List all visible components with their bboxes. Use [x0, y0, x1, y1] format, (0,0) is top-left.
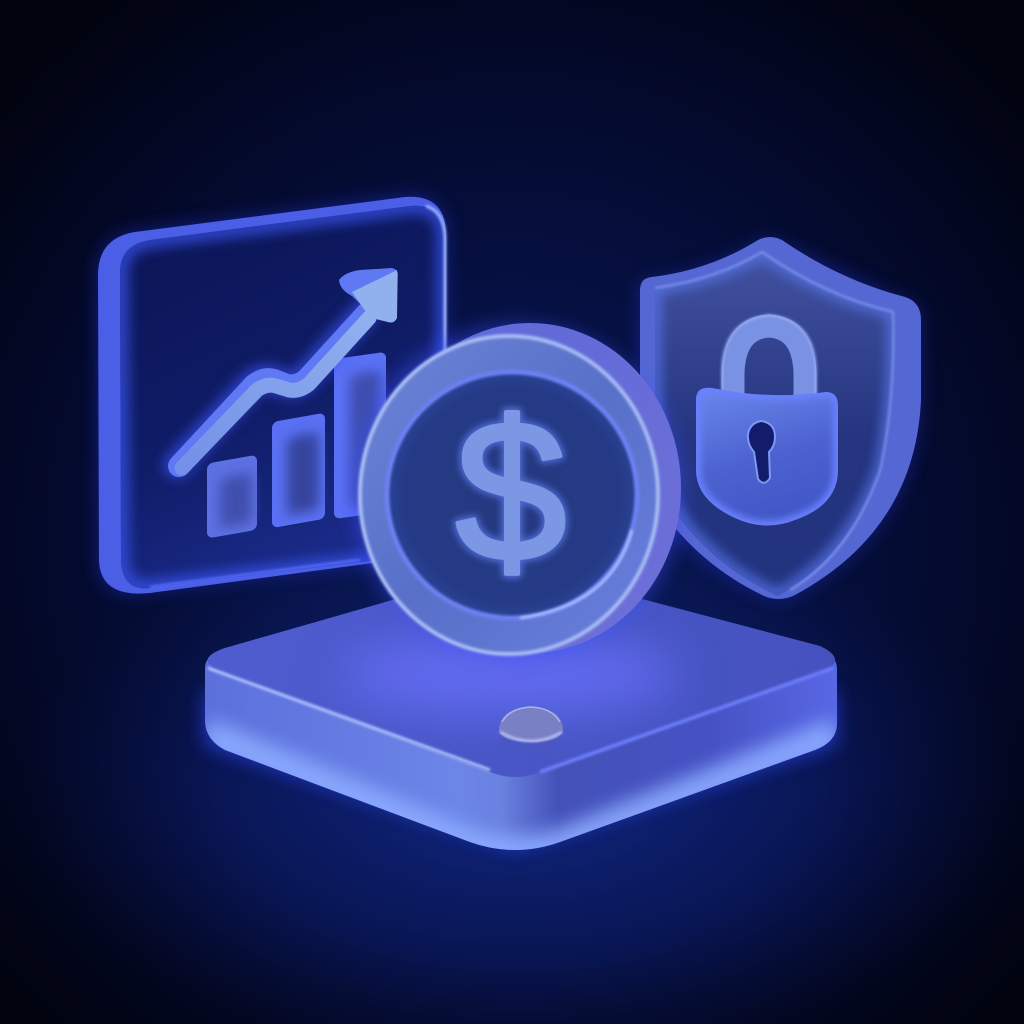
coin glow — [353, 324, 683, 660]
panel inner glow — [120, 206, 445, 588]
panel: growth chart — [98, 197, 446, 594]
platform side — [205, 646, 837, 850]
platform side bottom light — [205, 735, 837, 853]
padlock body — [696, 388, 838, 526]
shield edge highlight — [655, 252, 893, 590]
chart bar 1 — [207, 455, 257, 539]
platform top — [208, 568, 835, 777]
panel: platform — [205, 568, 837, 853]
dollar sign: $ — [455, 380, 567, 603]
platform coin light — [340, 633, 680, 717]
dollar sign: $ — [455, 380, 567, 603]
platform glow — [205, 690, 836, 850]
padlock shackle — [733, 326, 805, 400]
chart bar 2 — [272, 413, 325, 528]
coin face — [388, 373, 636, 617]
shield face — [655, 252, 893, 596]
coin rim — [359, 335, 659, 655]
shield inner glow — [655, 252, 893, 596]
coin inner ring — [387, 372, 637, 618]
chart arrow — [177, 268, 398, 468]
platform button — [499, 707, 563, 756]
padlock keyhole — [748, 421, 775, 483]
panel edge highlight — [426, 206, 445, 360]
chart bar 3 — [334, 352, 386, 519]
panel glow — [98, 197, 446, 592]
platform edge highlight — [208, 668, 490, 770]
floor glow — [0, 500, 1024, 1024]
panel face — [120, 206, 445, 588]
panel: security shield — [640, 237, 921, 601]
shield slab — [640, 237, 921, 599]
shield glow — [640, 238, 920, 601]
panel: dollar coin — [353, 323, 683, 660]
coin back edge — [379, 323, 681, 653]
panel slab — [98, 197, 446, 594]
padlock — [696, 315, 838, 526]
